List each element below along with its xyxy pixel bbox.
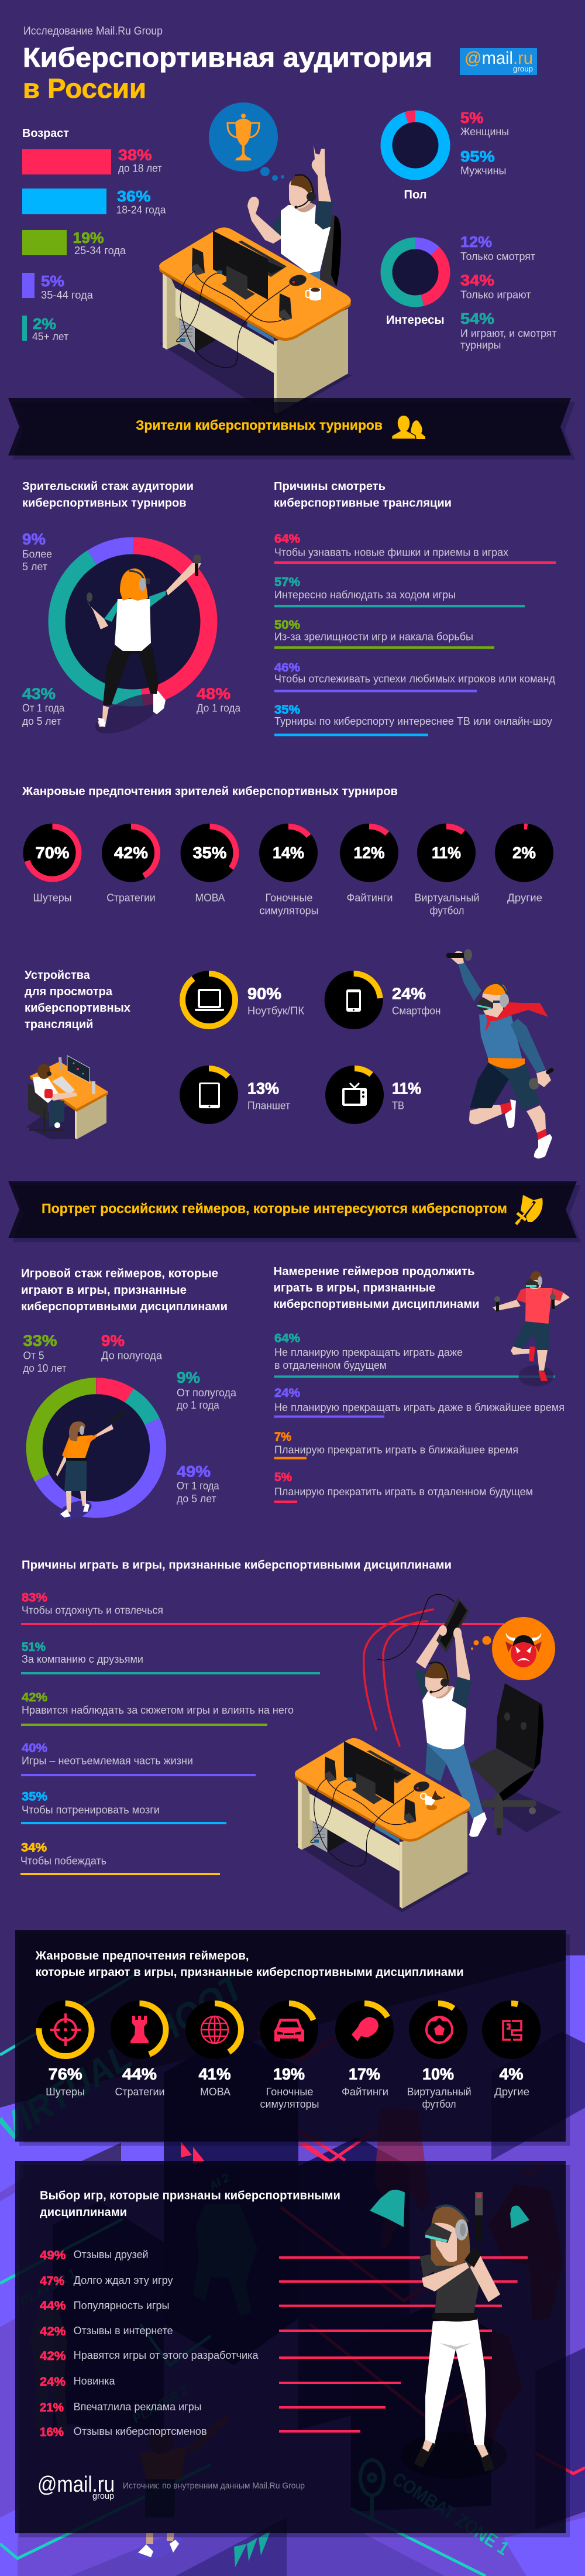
arena text: AI 2 [207,2171,232,2194]
device: phone 24%: Смартфон [392,1005,441,1016]
age bar 38% [22,146,162,174]
label 48%: До 1 года [197,703,241,714]
heading: Выбор игр, которые признаны киберспортивными [40,2190,340,2202]
heading [274,1265,480,1311]
row 24%: Новинка [74,2375,116,2387]
label 9% teal: 9% [177,1369,200,1386]
device: tablet 13% [180,1066,290,1124]
banner: gamer portrait [8,1181,581,1242]
section: viewers genre preferences [22,785,553,917]
reason 40%: Игры – неотъемлемая часть жизни [22,1755,193,1767]
row 21%: 21% [40,2401,64,2414]
genre 14%: Гоночные [266,892,312,904]
genre: shooters 76% [36,2000,95,2098]
genre 12% [340,824,398,904]
interests donut: Только смотрят [460,251,535,262]
arena soldiers [30,2108,563,2517]
banner: tournament viewers [8,398,575,460]
device: laptop 90%: Ноутбук/ПК [247,1005,305,1016]
intention 64%: Не планирую прекращать играть даже [274,1347,463,1358]
heading: Жанровые предпочтения геймеров, [35,1950,249,1962]
interests donut: Интересы [386,314,445,327]
row 44% [40,2299,502,2313]
heading: Причины смотреть [274,480,386,493]
genre 42% [102,824,160,904]
heading [35,1950,464,1979]
reason 46%: Чтобы отслеживать успехи любимых игроков или команд [274,673,555,685]
arena text: COMBAT ZONE 1 [388,2468,513,2559]
label 9%: 9% [22,530,46,548]
genre 11%: 11% [432,844,461,862]
illustration: woman with blaster [56,1412,125,1524]
reason 83% [21,1591,504,1625]
genre 12%: 12% [353,844,385,862]
icon: other [503,2021,521,2040]
interests donut: турниры [460,340,501,351]
section: viewing devices [25,949,555,1159]
gender donut: 5% [460,109,483,126]
row 42% developer [40,2349,492,2363]
label 9% red: До полугода [101,1350,163,1362]
reason 35% [21,1790,226,1824]
genre: shooters 76%: Шутеры [46,2086,85,2098]
row 16%: 16% [40,2426,64,2439]
intention 7%: Планирую прекратить играть в ближайшее время [274,1444,518,1455]
icon: ghost large [370,2190,405,2227]
illustration: gamer at desk [159,145,353,418]
section: reasons to watch [274,480,556,736]
chair [469,1683,562,1835]
interests donut [381,233,557,351]
reason 57%: Интересно наблюдать за ходом игры [274,589,456,601]
row 42% developer: Нравятся игры от этого разработчика [74,2349,259,2361]
heading: для просмотра [25,985,113,998]
row 47%: Долго ждал эту игру [74,2274,173,2286]
icon: boxing glove [352,2017,378,2041]
gender donut: Женщины [460,126,509,138]
genre 14%: симуляторы [260,905,318,917]
reason 64%: 64% [274,532,300,546]
arena text [0,1965,545,2559]
intention 24%: 24% [274,1386,300,1400]
arena lines [0,1973,585,2576]
genre 35% [180,824,239,904]
row 21%: Впечатлила реклама игры [74,2401,202,2413]
heading [40,2190,340,2219]
reason 46%: 46% [274,661,300,674]
label 48% [197,685,241,714]
intention 24% [274,1386,565,1418]
genre: other 4% [482,2000,541,2098]
heading [25,969,130,1031]
interests donut: 54% [460,310,494,327]
label 43%: От 1 года [22,703,65,714]
header [23,25,537,104]
panel: game selection [15,2161,566,2533]
heading: Жанровые предпочтения зрителей киберспортивных турниров [22,785,398,798]
heading: киберспортивные трансляции [274,497,452,510]
reason 34% [20,1841,220,1875]
section: reasons to play [20,1558,562,1912]
genre: shooters 76%: 76% [49,2065,82,2083]
scene: isometric game arena background [0,1914,585,2576]
row 44%: 44% [40,2299,66,2313]
arena text: PLAYER 1 [18,2266,78,2309]
label 33%: От 5 [23,1350,44,1362]
age bar 38%: 38% [118,146,152,164]
label 33%: до 10 лет [23,1362,67,1374]
interests donut: И играют, и смотрят [460,328,557,340]
genre: strategy 44%: Стратегии [115,2086,165,2098]
intention 64%: 64% [274,1332,300,1345]
icon: people [391,415,425,439]
reason 57%: 57% [274,576,300,589]
illustration: VR woman [87,554,201,742]
reason 64%: Чтобы узнавать новые фишки и приемы в играх [274,547,508,559]
title [23,42,432,104]
icon: ball [425,2016,453,2044]
gender donut: Мужчины [460,165,507,177]
icon: ghost small [510,2205,529,2228]
reason 35%: 35% [22,1790,47,1804]
age bar 19% [22,229,126,256]
source: Источник: по внутренним данным Mail.Ru Group [123,2481,305,2491]
icon: target [50,2013,81,2046]
device: tablet 13%: Планшет [247,1099,290,1111]
reason 50%: 50% [274,618,300,632]
reason 40%: 40% [22,1742,47,1755]
icon: trophy thought bubble [209,102,284,181]
row 24% [40,2375,401,2389]
label 43%: до 5 лет [22,715,61,727]
genre 2%: Другие [507,892,542,904]
teal chevrons [234,2530,271,2567]
genre 70% [23,824,82,904]
genre 35%: МОВА [195,892,225,904]
age bar 2%: 45+ лет [32,331,68,342]
age bar 5% [22,272,94,301]
title: Киберспортивная аудитория [23,42,432,73]
heading: Игровой стаж геймеров, которые [21,1268,218,1280]
heading: Причины играть в игры, признанные киберспортивными дисциплинами [22,1558,452,1571]
intention 64%: в отдаленном будущем [274,1359,387,1371]
reason 35%: 35% [274,703,300,717]
reason 57% [274,576,525,607]
interests donut: 12% [460,233,492,251]
genre 11%: футбол [429,905,464,917]
row 49%: Отзывы друзей [74,2249,149,2260]
interests donut: Только играют [460,289,531,301]
footer logo: mail.ru group: @mail.ru [37,2472,115,2497]
heading [274,480,452,510]
label 43% [22,685,65,727]
gender donut: 95% [460,148,495,165]
icon: car [274,2019,304,2041]
red chevrons [181,2142,205,2164]
genre: strategy 44%: 44% [122,2065,157,2083]
icon: devil thought bubble [471,1617,555,1680]
genre 11% [414,824,480,917]
genre: MOBA 41%: МОВА [200,2086,230,2098]
title: в России [23,73,146,104]
row 49% [40,2249,528,2262]
reason 42% [21,1691,294,1726]
section: intention to keep playing [274,1265,570,1503]
label 9% red: 9% [101,1332,125,1349]
reason 83%: Чтобы отдохнуть и отвлечься [22,1605,163,1616]
reason 35%: Турниры по киберспорту интереснее ТВ или онлайн-шоу [274,715,552,727]
label 9% teal [177,1369,237,1411]
genre 12%: Файтинги [346,892,393,904]
genre 70%: Шутеры [33,892,71,904]
reason 83%: 83% [22,1591,47,1605]
genre 2% [495,824,553,904]
illustration: jumping man with cape [446,949,555,1159]
row 42% internet [40,2325,492,2338]
section: viewing tenure [22,480,241,742]
age bar 19%: 25-34 года [74,245,126,256]
row 21% [40,2401,386,2414]
reason 34%: Чтобы побеждать [20,1855,106,1867]
cable [377,1594,455,1660]
logo: mail.ru group: group [513,64,533,73]
label 9% teal: до 1 года [177,1399,220,1411]
banner: gamer portrait: Портрет российских геймеров, которые интересуются киберспортом [42,1201,507,1216]
panel shadows [19,1934,570,2537]
row 42% developer: 42% [40,2349,66,2363]
row 44%: Популярность игры [74,2300,170,2311]
row 24%: 24% [40,2375,66,2389]
intention 7%: 7% [274,1430,291,1444]
arena text: AI 2 [520,2160,545,2182]
genre: racing 19%: Гоночные [266,2086,314,2098]
reason 35% [274,703,552,736]
label 33% [23,1332,67,1374]
label 49%: до 5 лет [177,1493,216,1505]
heading: играют в игры, признанные [21,1284,187,1297]
age bar 5%: 35-44 года [41,289,94,301]
device: TV 11%: 11% [392,1080,421,1098]
label 9% red [101,1332,163,1362]
header caption: Исследование Mail.Ru Group [23,25,163,37]
device: tablet 13%: 13% [247,1080,279,1098]
intention 5%: 5% [274,1471,292,1484]
intention 5%: Планирую прекратить играть в отдаленном будущем [274,1486,533,1498]
arena target [360,2460,384,2517]
panel: gamer genre preferences [15,1930,566,2142]
reason 34%: 34% [21,1841,47,1855]
age heading: Возраст [22,127,69,140]
illustration: VR woman with pistol [401,2192,507,2479]
label 33%: 33% [23,1332,57,1349]
genre 35%: 35% [193,844,227,862]
age bar 36%: 36% [117,187,151,205]
genre 14%: 14% [273,844,304,862]
reason 51% [21,1640,320,1674]
genre 14% [259,824,318,917]
gender donut [381,109,509,201]
label 49%: От 1 года [177,1480,220,1492]
heading: дисциплинами [40,2206,127,2219]
age bar 5%: 5% [41,272,64,290]
section: gaming tenure [21,1268,237,1524]
icon: sword and shield [516,1195,543,1224]
arena player feet [133,2532,185,2564]
mug [306,288,321,301]
reason 64% [274,532,556,564]
genre: fighting 17%: Файтинги [342,2086,388,2098]
reason 35%: Чтобы потренировать мозги [22,1804,160,1816]
age bar 2% [22,315,68,342]
gender donut: Пол [404,189,427,201]
genre: MOBA 41% [185,2000,244,2098]
age bar 19%: 19% [73,229,104,246]
reason 50%: Из-за зрелищности игр и накала борьбы [274,631,473,643]
heading: играть в игры, признанные [274,1282,435,1294]
reason 46% [274,661,555,692]
row 47%: 47% [40,2274,64,2288]
spilled mug [421,1790,445,1810]
genre 2%: 2% [512,844,536,862]
genre: fighting 17% [335,2000,394,2098]
illustration: small desk gamer [26,1056,108,1139]
heading [21,1268,228,1313]
reason 42%: Нравится наблюдать за сюжетом игры и влиять на него [22,1704,294,1716]
reason 42%: 42% [22,1691,47,1704]
row 47% [40,2274,518,2288]
label 9% [22,530,52,573]
motion swooshes [364,1609,433,1746]
banner: tournament viewers: Зрители киберспортивных турниров [136,417,383,433]
genre: football 10%: Виртуальный [407,2086,472,2098]
age bar 36% [22,187,166,216]
genre: MOBA 41%: 41% [199,2065,231,2083]
genre: racing 19%: симуляторы [260,2098,319,2110]
label 9% teal: От полугода [177,1387,237,1399]
row 16%: Отзывы киберспортсменов [74,2426,207,2437]
device: TV 11%: ТВ [392,1099,404,1111]
label 9%: 5 лет [22,561,47,573]
device: laptop 90%: 90% [247,985,281,1003]
icon: rook [130,2016,149,2043]
ring chart [35,1386,158,1510]
genre 42%: 42% [114,844,148,862]
row 49%: 49% [40,2249,66,2262]
device: TV 11% [325,1066,421,1124]
intention 24%: Не планирую прекращать играть даже в ближайшее время [274,1402,565,1413]
heading: киберспортивных турниров [22,497,187,510]
heading [22,480,194,510]
genre: football 10%: футбол [422,2098,456,2110]
icon: globe [201,2016,228,2043]
ring chart [57,546,209,698]
genre 42%: Стратегии [106,892,156,904]
arena text: PLAYER 2 [130,2382,191,2426]
genre: racing 19%: 19% [273,2065,305,2083]
genre 70%: 70% [35,844,70,862]
age chart [22,127,166,342]
heading: киберспортивных [25,1002,130,1015]
intention 64% [274,1332,555,1378]
heading: Зрительский стаж аудитории [22,480,194,493]
reason 51%: За компанию с друзьями [22,1653,143,1665]
footer logo: mail.ru group: group [92,2491,114,2501]
genre: football 10%: 10% [422,2065,454,2083]
label 9%: Более [22,548,52,560]
interests donut: 34% [460,272,494,289]
genre: football 10% [407,2000,472,2110]
genre: other 4%: Другие [494,2086,529,2098]
device: laptop 90% [180,971,305,1029]
device: phone 24%: 24% [392,985,426,1003]
heading: Устройства [25,969,91,982]
row 42% internet: Отзывы в интернете [74,2325,173,2337]
age bar 38%: до 18 лет [118,163,162,174]
label 49%: 49% [177,1462,211,1480]
genre: racing 19% [260,2000,319,2110]
reason 50% [274,618,494,649]
heading: киберспортивными дисциплинами [274,1298,480,1311]
logo: mail.ru group [460,48,537,75]
age bar 2%: 2% [33,315,56,333]
heading: трансляций [25,1018,93,1031]
genre 11%: Виртуальный [414,892,480,904]
illustration: angry gamer with keyboard [295,1594,562,1912]
reason 40% [21,1742,256,1776]
heading: Намерение геймеров продолжить [274,1265,475,1278]
intention 5% [274,1471,533,1503]
heading: которые играют в игры, признанные киберспортивными дисциплинами [36,1966,464,1979]
genre: other 4%: 4% [500,2065,524,2083]
genre: fighting 17%: 17% [349,2065,380,2083]
logo: mail.ru group: @mail.ru [464,49,533,68]
reason 51%: 51% [22,1640,46,1654]
age bar 36%: 18-24 года [116,204,166,216]
label 48%: 48% [197,685,230,703]
heading: киберспортивными дисциплинами [21,1300,228,1313]
label 49% [177,1462,220,1505]
row 16% [40,2426,360,2439]
illustration: man in red VR [493,1271,570,1386]
genre: strategy 44% [110,2000,168,2098]
device: phone 24% [325,971,441,1029]
label 43%: 43% [22,685,56,703]
intention 7% [274,1430,518,1460]
row 42% internet: 42% [40,2325,66,2338]
